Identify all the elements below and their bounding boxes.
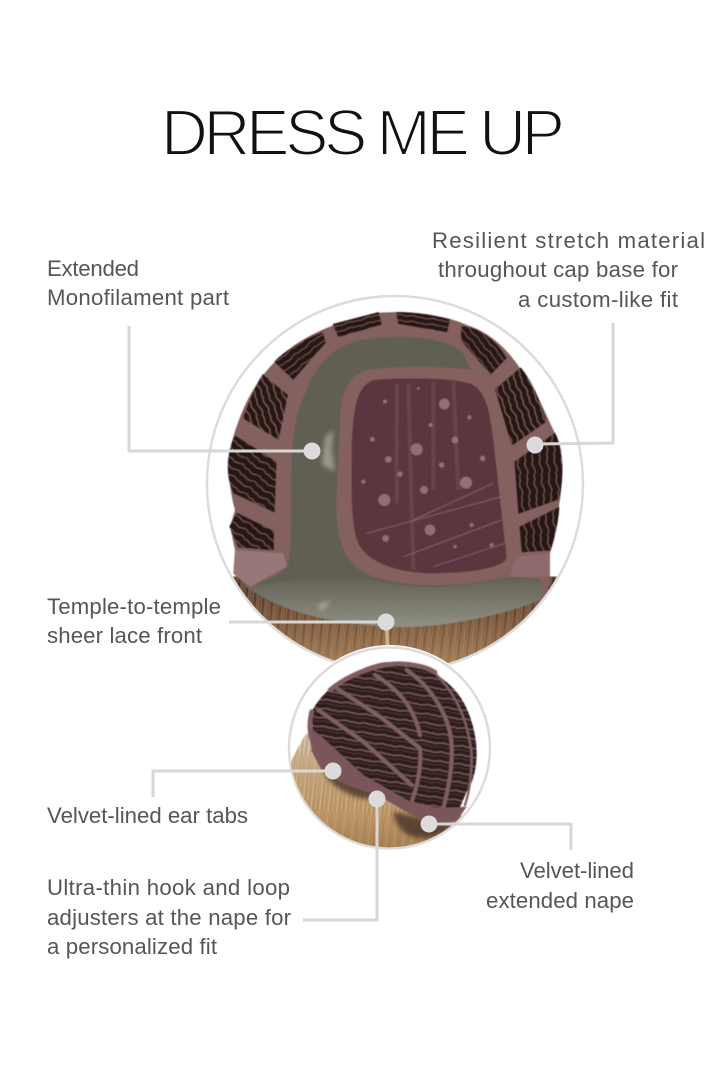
- label text: a custom-like fit: [518, 287, 678, 312]
- leader line: [229, 620, 386, 624]
- label text: Velvet-lined: [520, 858, 634, 883]
- title: DRESS ME UP: [161, 96, 565, 169]
- inner lace panel: [352, 378, 507, 573]
- callout: temple-to-temple lace front: [47, 594, 394, 648]
- label text: sheer lace front: [47, 623, 202, 648]
- label text: Extended: [47, 256, 139, 281]
- sheer lace front: [250, 577, 542, 627]
- ear side tabs: [233, 550, 287, 587]
- leader line: [429, 824, 571, 850]
- leader line: [535, 323, 613, 444]
- small circle: back cap view: [286, 645, 492, 858]
- marker dot: [526, 436, 544, 454]
- label text: adjusters at the nape for: [47, 905, 292, 930]
- callout: velvet-lined ear tabs: [47, 762, 342, 828]
- label text: throughout cap base for: [438, 257, 679, 282]
- blonde hair under the lace front: [232, 576, 558, 663]
- mauve cap base: [229, 312, 562, 600]
- callout: resilient stretch material: [432, 228, 705, 454]
- leader line: [153, 771, 333, 797]
- leader line: [303, 799, 377, 920]
- dark roots: [323, 773, 453, 838]
- light knot highlights: [317, 430, 335, 612]
- velvet nape band: [311, 728, 467, 822]
- wig cap back photo illustration: [287, 662, 477, 858]
- marker dot: [304, 442, 320, 460]
- label text: Velvet-lined ear tabs: [47, 803, 248, 828]
- label text: Ultra-thin hook and loop: [47, 875, 290, 900]
- callout: hook and loop adjusters: [47, 790, 386, 959]
- marker dot: [324, 762, 342, 780]
- label text: extended nape: [486, 888, 634, 913]
- label text: Monofilament part: [47, 285, 229, 310]
- leader line: [129, 326, 312, 451]
- large circle: front cap view: [207, 296, 583, 677]
- monofilament part: [250, 337, 542, 627]
- callout: velvet-lined extended nape: [420, 816, 634, 913]
- marker dot: [420, 816, 438, 832]
- callout: extended monofilament part: [47, 256, 320, 460]
- marker dot: [368, 790, 386, 808]
- marker dot: [378, 614, 394, 630]
- knot dots: [361, 387, 494, 548]
- label text: a personalized fit: [47, 934, 217, 959]
- mauve cap bands: [310, 664, 472, 808]
- blonde hair: [290, 733, 462, 848]
- dark wefted hair panels: [228, 312, 562, 552]
- label text: Temple-to-temple: [47, 594, 221, 619]
- label text: Resilient stretch material: [432, 228, 705, 253]
- dark wefted cap: [312, 662, 477, 815]
- wig cap front photo illustration: [228, 312, 563, 677]
